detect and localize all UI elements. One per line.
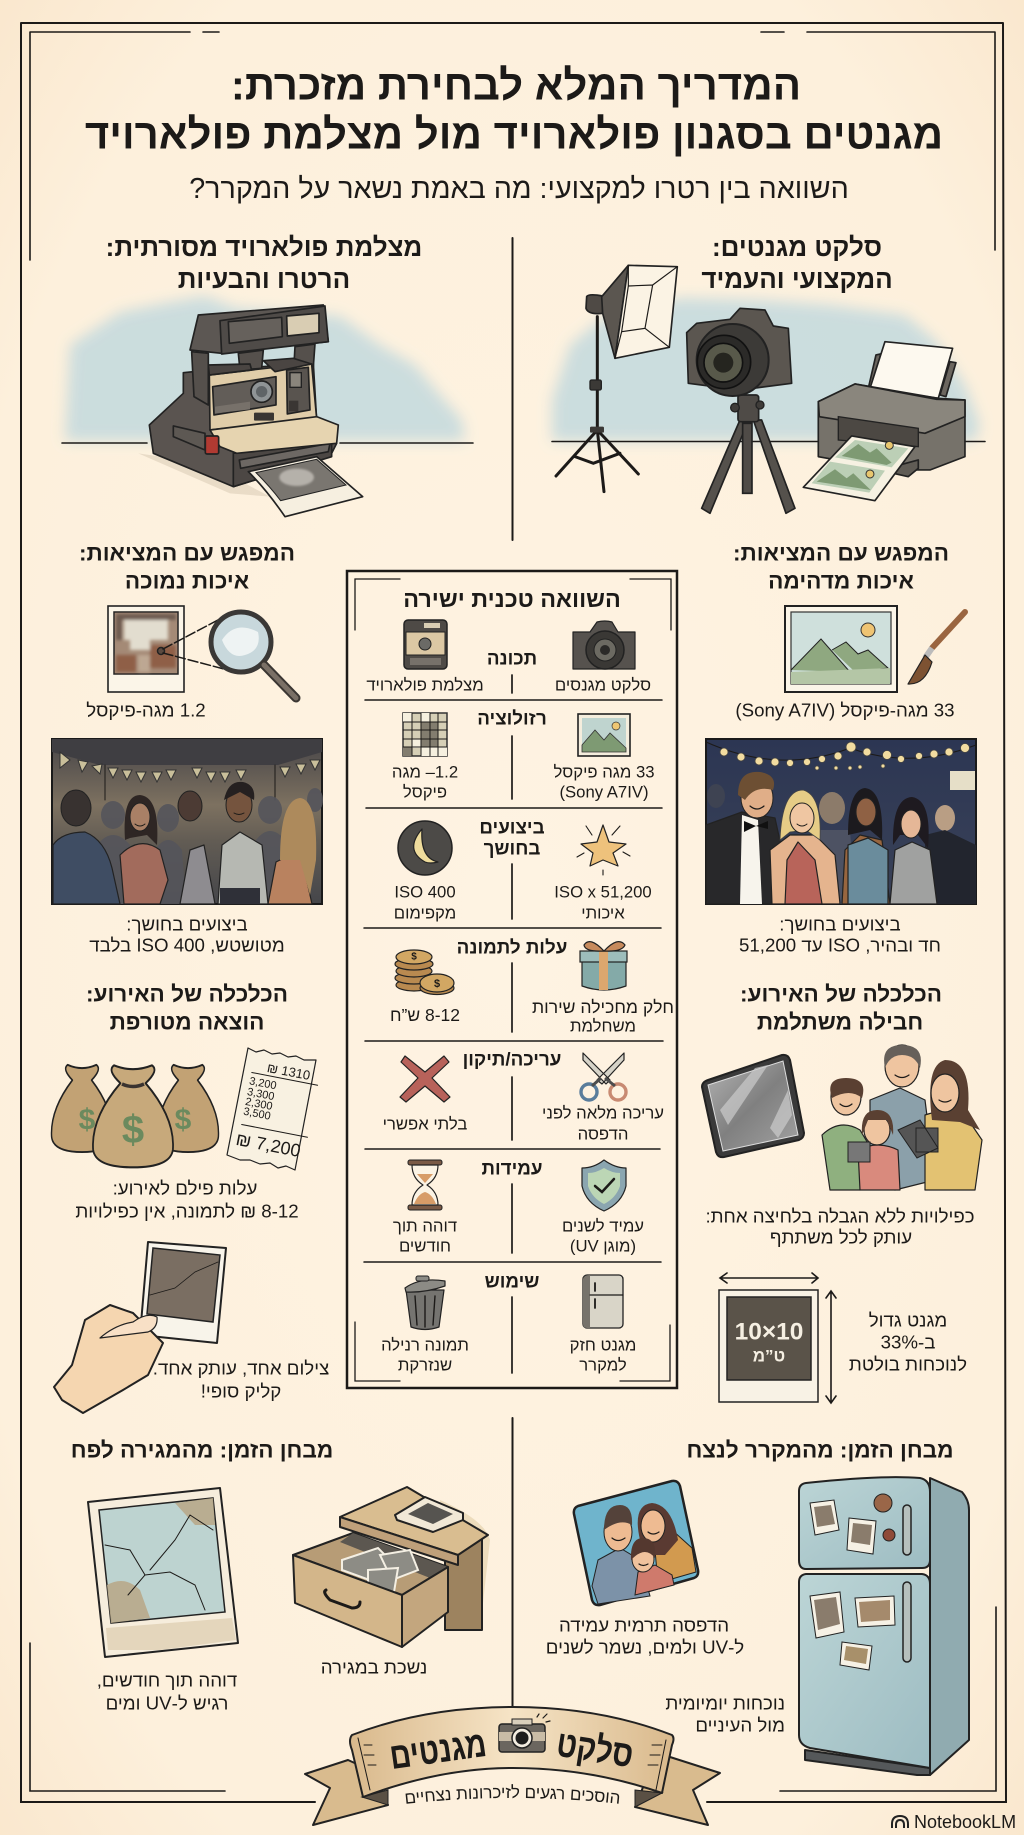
caption: daily presence: נוכחות יומיומית bbox=[665, 1692, 785, 1714]
row: resolution: 1.2– מגה bbox=[392, 762, 458, 782]
row: editing: בלתי אפשרי bbox=[383, 1114, 467, 1134]
column dividers bbox=[511, 675, 513, 1373]
row: low light: ISO 400 bbox=[394, 882, 456, 902]
icon: family photo magnet bbox=[574, 1481, 698, 1605]
caption: film cost bbox=[75, 1178, 299, 1222]
center divider lower bbox=[512, 1418, 514, 1708]
icon: drawer full of photos bbox=[293, 1487, 490, 1647]
caption: unlimited duplicates bbox=[705, 1206, 975, 1248]
panel frame bbox=[347, 571, 677, 1388]
icon: receipt: 3,500 bbox=[242, 1106, 272, 1123]
center divider upper bbox=[512, 238, 514, 540]
row: low light: איכותי bbox=[581, 904, 625, 922]
icon: money bags: $ bbox=[175, 1104, 192, 1136]
caption: fades in months: רגיש ל-UV ומים bbox=[106, 1692, 228, 1714]
scene: dim blurry party bbox=[52, 739, 323, 904]
caption: fades in months: דוהה תוך חודשים, bbox=[97, 1670, 237, 1690]
row: resolution: 33 מגה פיקסל bbox=[553, 762, 655, 782]
row: durability: עמידות bbox=[482, 1158, 542, 1178]
tagline: הוסכים רגעים לזיכרונות נצחיים bbox=[406, 1784, 620, 1804]
icon: happy family bbox=[822, 1045, 982, 1190]
caption: fades in months bbox=[97, 1670, 237, 1714]
table heading: השוואה טכנית ישירה bbox=[403, 586, 621, 612]
left economy heading: הכלכלה של האירוע: bbox=[86, 982, 288, 1006]
illustration: printer with photos bbox=[803, 342, 965, 501]
row: low light: מקפימום bbox=[394, 904, 456, 922]
row: resolution: פיקסל bbox=[403, 782, 447, 802]
row: durability: דוהה תוך bbox=[393, 1216, 457, 1236]
scene: sharp bright party bbox=[706, 739, 976, 904]
caption: thermal print: ל-UV ולמים, נשמר לשנים bbox=[546, 1636, 744, 1658]
caption: daily presence: מול העיניים bbox=[695, 1714, 785, 1736]
caption: unlimited duplicates: עותק לכל משתתף bbox=[770, 1226, 912, 1248]
row dividers bbox=[364, 700, 663, 1262]
icon: pixelated polaroid and magnifier bbox=[108, 606, 296, 698]
heading: polaroid column: מצלמת פולארויד מסורתית: bbox=[106, 232, 422, 262]
left economy heading bbox=[86, 982, 288, 1034]
icon: banner camera bbox=[499, 1714, 550, 1752]
row: usage: שימוש bbox=[485, 1270, 539, 1292]
icon: shield bbox=[582, 1160, 626, 1211]
icon: coins bbox=[395, 950, 454, 994]
illustration: horizon right bbox=[552, 440, 985, 442]
caption: low light right bbox=[739, 914, 941, 956]
row: editing: הדפסה bbox=[578, 1124, 628, 1144]
heading: magnets column bbox=[701, 232, 893, 294]
panel: technical comparison bbox=[347, 571, 677, 1388]
row: low light: ביצועים bbox=[479, 816, 545, 838]
icon: hourglass bbox=[408, 1160, 442, 1210]
right economy heading bbox=[740, 982, 942, 1034]
icon: magnet sample bbox=[702, 1055, 804, 1157]
icon: receipt: 3,300 bbox=[246, 1086, 275, 1103]
left economy heading: הוצאה מטורפת bbox=[110, 1010, 264, 1034]
subtitle: השוואה בין רטרו למקצועי: מה באמת נשאר על המקרר? bbox=[189, 173, 849, 205]
caption: 33 percent larger: ב-33% bbox=[881, 1332, 935, 1352]
icon: pro camera bbox=[573, 621, 635, 669]
row: cost per photo: עלות לתמונה bbox=[457, 936, 567, 958]
icon: receipt: 1310 ₪ bbox=[266, 1060, 311, 1083]
title: המדריך המלא לבחירת מזכרת: bbox=[231, 62, 801, 108]
illustration: pro camera on tripod bbox=[687, 308, 795, 513]
icon: small polaroid bbox=[404, 620, 447, 669]
caption: film cost: 8-12 ₪ לתמונה, אין כפילויות bbox=[75, 1200, 299, 1222]
row: usage: שנזרקת bbox=[398, 1356, 452, 1374]
icon: fridge with magnets bbox=[799, 1477, 969, 1775]
heading: polaroid column: הרטרו והבעיות bbox=[178, 264, 350, 294]
row: feature: תכונה bbox=[487, 648, 537, 668]
caption: thermal print: הדפסה תרמית עמידה bbox=[559, 1614, 729, 1636]
icon: red x bbox=[400, 1056, 450, 1102]
title: מגנטים בסגנון פולארויד מול מצלמת פולארויד bbox=[85, 110, 943, 158]
left column reality heading: המפגש עם המציאות: bbox=[79, 540, 295, 566]
caption: forgotten in drawer: נשכת במגירה bbox=[321, 1656, 427, 1678]
brand word left: מגנטים bbox=[387, 1723, 489, 1777]
left column reality heading: איכות נמוכה bbox=[125, 568, 249, 594]
row: durability: (מוגן UV) bbox=[570, 1236, 636, 1256]
icon: 10x10 magnet size bbox=[719, 1273, 836, 1403]
icon: money bags: $ bbox=[79, 1104, 96, 1136]
row: durability: חודשים bbox=[399, 1236, 451, 1256]
ribbon band bbox=[350, 1707, 674, 1797]
row: editing: עריכה/תיקון bbox=[463, 1048, 561, 1070]
heading: time test right: מבחן הזמן: מהמקרר לנצח bbox=[686, 1438, 954, 1462]
ribbon tail left bbox=[305, 1760, 388, 1825]
illustration: horizon left bbox=[62, 442, 473, 444]
row: resolution: רזולוציה bbox=[477, 708, 547, 728]
illustration: vintage polaroid camera bbox=[138, 305, 363, 517]
caption: thermal print bbox=[546, 1614, 744, 1658]
icon: money bags: $ bbox=[122, 1108, 144, 1152]
caption: unlimited duplicates: כפילויות ללא הגבלה בלחיצה אחת: bbox=[705, 1206, 975, 1226]
icon: trash can bbox=[405, 1276, 445, 1330]
row: cost per photo bbox=[390, 936, 674, 1036]
right column reality heading bbox=[733, 540, 949, 594]
row: cost per photo: חלק מחכילה שירות bbox=[532, 997, 674, 1017]
caption: one shot: קליק סופי! bbox=[201, 1380, 281, 1402]
illustration: softbox light on stand bbox=[556, 265, 677, 492]
row: feature: סלקט מגנסים bbox=[555, 676, 651, 694]
caption: low light left: מטושטש, ISO 400 בלבד bbox=[89, 934, 285, 956]
icon: 10x10 magnet size: ט”מ bbox=[753, 1346, 785, 1366]
title bbox=[85, 62, 943, 158]
brand word right: סלקט bbox=[554, 1723, 636, 1775]
illustration: watercolor backdrop left bbox=[65, 296, 465, 441]
right column reality heading: המפגש עם המציאות: bbox=[733, 540, 949, 566]
caption: low light right: חד ובהיר, ISO עד 51,200 bbox=[739, 934, 941, 956]
right economy heading: חבילה משתלמת bbox=[757, 1010, 923, 1034]
right column reality heading: איכות מדהימה bbox=[768, 568, 914, 594]
caption: film cost: עלות פילם לאירוע: bbox=[113, 1178, 257, 1198]
row: editing: עריכה מלאה לפני bbox=[542, 1104, 664, 1122]
icon: money bags bbox=[51, 1065, 219, 1167]
row: resolution: (Sony A7IV) bbox=[559, 782, 649, 802]
row: low light: בחושך bbox=[484, 838, 540, 858]
caption: daily presence bbox=[665, 1692, 785, 1736]
row: durability bbox=[393, 1158, 644, 1256]
icon: small fridge bbox=[583, 1275, 623, 1328]
icon: hand holding polaroid bbox=[54, 1242, 226, 1413]
icon: scissors bbox=[581, 1053, 626, 1100]
caption: low light left bbox=[89, 914, 285, 956]
heading: polaroid column bbox=[106, 232, 422, 294]
ribbon tail right bbox=[635, 1757, 720, 1825]
icon: star bbox=[577, 825, 630, 875]
caption: 33 percent larger: לנוכחות בולטת bbox=[849, 1354, 967, 1374]
caption: 33 percent larger: מגנט גדול bbox=[869, 1310, 947, 1330]
row: low light: ISO x 51,200 bbox=[554, 882, 652, 902]
row: feature: מצלמת פולארויד bbox=[366, 676, 484, 694]
caption: one shot: צילום אחד, עותק אחד. bbox=[153, 1358, 329, 1378]
icon: coins: $ bbox=[411, 952, 417, 962]
row: durability: עמיד לשנים bbox=[562, 1216, 644, 1236]
icon: gift box bbox=[580, 942, 627, 990]
caption: 33 percent larger bbox=[849, 1310, 967, 1374]
caption: low light left: ביצועים בחושך: bbox=[126, 914, 248, 934]
right economy heading: הכלכלה של האירוע: bbox=[740, 982, 942, 1006]
banner: brand ribbon bbox=[304, 1706, 721, 1826]
row: resolution bbox=[392, 708, 655, 802]
caption: 33 megapixel: 33 מגה-פיקסל (Sony A7IV) bbox=[735, 700, 955, 720]
left column reality heading bbox=[79, 540, 295, 594]
icon: receipt: 7,200 ₪ bbox=[234, 1129, 302, 1161]
row: cost per photo: 8-12 ש”ח bbox=[390, 1005, 460, 1025]
icon: coins: $ bbox=[434, 978, 440, 990]
row: usage: תמונה רנילה bbox=[381, 1336, 469, 1354]
brand mark: NotebookLM: NotebookLM bbox=[914, 1812, 1016, 1832]
row: cost per photo: משחלמת bbox=[570, 1016, 636, 1036]
row: usage: מגנט חזק bbox=[570, 1336, 636, 1354]
icon: 10x10 magnet size: 10×10 bbox=[735, 1318, 803, 1346]
heading: time test left: מבחן הזמן: מהמגירה לפח bbox=[71, 1438, 333, 1462]
row: low light bbox=[394, 816, 652, 922]
row: usage bbox=[381, 1270, 636, 1374]
row: usage: למקרר bbox=[579, 1356, 627, 1374]
icon: receipt bbox=[227, 1048, 321, 1170]
row: editing bbox=[383, 1048, 664, 1144]
illustration: watercolor backdrop right bbox=[552, 298, 980, 441]
icon: sharp landscape bbox=[578, 714, 630, 756]
icon: receipt: 3,200 bbox=[248, 1075, 277, 1092]
caption: low light right: ביצועים בחושך: bbox=[779, 914, 901, 934]
icon: cracked faded polaroid bbox=[88, 1488, 238, 1657]
heading: magnets column: המקצועי והעמיד bbox=[701, 264, 893, 294]
caption: 1.2 megapixel: 1.2 מגה-פיקסל bbox=[86, 700, 206, 720]
icon: pixel grid bbox=[403, 713, 447, 756]
heading: magnets column: סלקט מגנטים: bbox=[712, 232, 882, 262]
icon: framed landscape and paintbrush bbox=[785, 606, 965, 692]
icon: moon bbox=[398, 821, 452, 875]
caption: one shot bbox=[153, 1358, 329, 1402]
row: feature bbox=[366, 620, 651, 694]
icon: receipt: 2,300 bbox=[244, 1096, 273, 1113]
